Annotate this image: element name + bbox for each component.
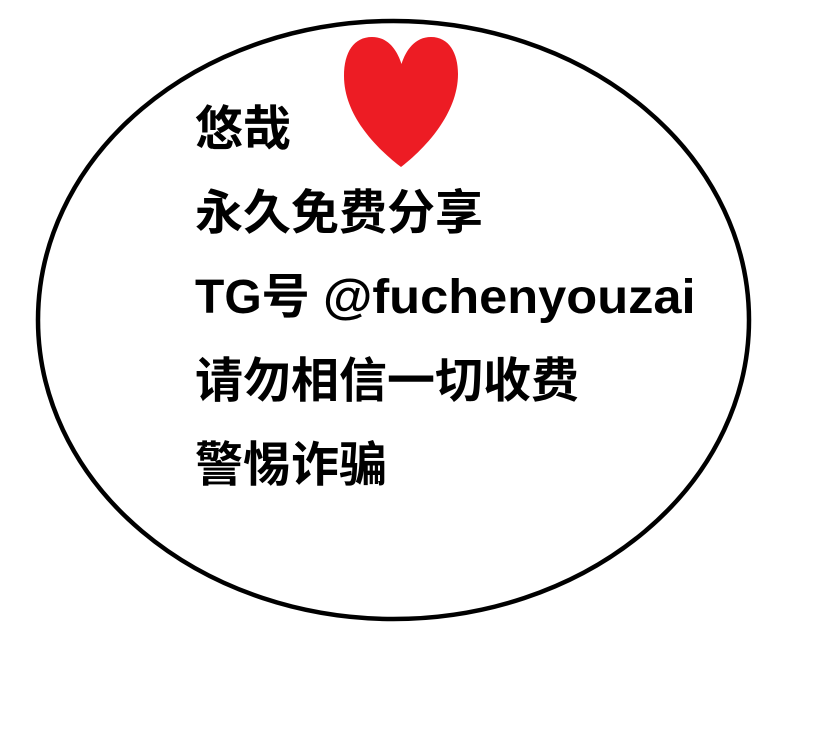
text: 悠哉: 悠哉 — [195, 103, 291, 156]
text: TG号: TG号 — [195, 271, 310, 324]
text: 请勿相信一切收费: 请勿相信一切收费 — [195, 355, 579, 408]
text: 警惕诈骗: 警惕诈骗 — [195, 439, 387, 492]
text: 永久免费分享: 永久免费分享 — [195, 187, 483, 240]
circle outline — [38, 21, 749, 619]
text: TG号: @fuchenyouzai — [323, 271, 696, 324]
icon: red heart — [344, 37, 458, 167]
